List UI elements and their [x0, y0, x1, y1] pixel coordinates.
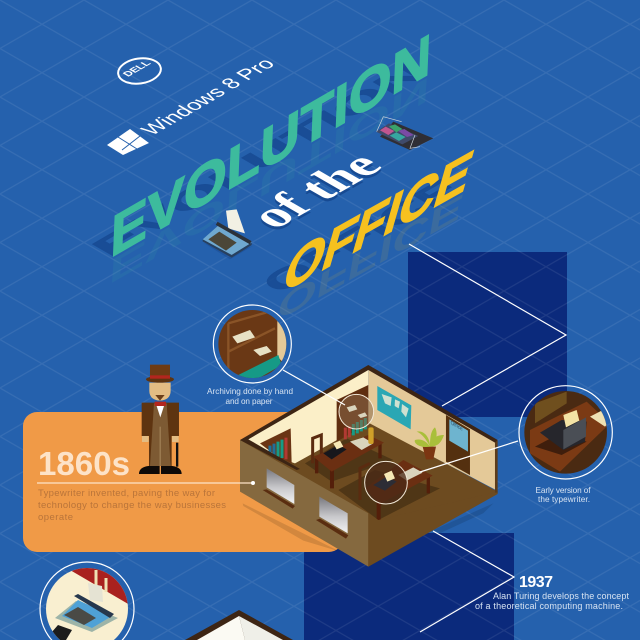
desk back [313, 435, 384, 488]
window right [316, 497, 348, 539]
window left [263, 468, 295, 509]
card description [38, 488, 226, 523]
chairs [313, 435, 370, 500]
connector: typewriter circle [420, 441, 518, 472]
back left wall [243, 368, 368, 463]
desk front [365, 460, 433, 520]
callout: archiving circle [213, 305, 293, 383]
icon: typewriter [203, 209, 253, 259]
plant [415, 427, 444, 459]
inner circle: typewriter highlight [365, 461, 407, 504]
title: of the: of the [236, 147, 394, 239]
title shadows and reflections: OFFICE [252, 174, 472, 298]
inner circle: shelf highlight [339, 394, 374, 429]
wall rim [240, 365, 498, 470]
floor [240, 422, 498, 567]
figure: Victorian man [139, 365, 182, 474]
caption: archiving: and on paper [226, 397, 273, 406]
connector: year line [37, 481, 255, 485]
room: next era office [185, 610, 293, 640]
door: Office [451, 420, 463, 433]
year heading: 1860s [38, 445, 130, 482]
door [446, 415, 470, 475]
title shadows and reflections: EVOLUTION [108, 68, 431, 292]
timeline entry: 1937: of a theoretical computing machine. [475, 601, 623, 611]
left bookshelf [260, 428, 292, 463]
Windows logo [107, 129, 149, 155]
caption: typewriter [536, 486, 591, 504]
caption: typewriter: the typewriter. [538, 495, 590, 504]
front right wall [368, 492, 498, 567]
caption: archiving [207, 387, 293, 406]
callout: bottom typewriter circle [39, 561, 135, 640]
Dell logo [116, 56, 163, 86]
connector lines [409, 244, 566, 632]
back right wall [368, 368, 496, 490]
title shadows and reflections: EVOLUTION [84, 58, 437, 262]
room: 1860s office [240, 365, 498, 567]
title: Office: OFFICE [276, 136, 480, 307]
panel: 1860s orange card [23, 412, 343, 552]
caption: archiving: Archiving done by hand [207, 387, 293, 396]
card description: operate [38, 512, 73, 523]
title: of the: of the [236, 144, 394, 236]
lamp [368, 427, 374, 444]
title shadows and reflections [84, 58, 472, 330]
front left wall [240, 440, 368, 567]
room shadow [243, 503, 493, 552]
callout: typewriter circle [519, 386, 613, 480]
title shadows and reflections: OFFICE [275, 185, 466, 330]
timeline entry: 1937 [475, 574, 629, 611]
card description: technology to change the way businesses [38, 500, 226, 511]
timeline entry: 1937: Alan Turing develops the concept [493, 591, 629, 601]
title: Evolution: EVOLUTION [109, 21, 432, 271]
wall map [377, 386, 411, 429]
timeline entry: 1937: 1937 [519, 574, 553, 591]
icon: tablet [376, 117, 433, 150]
caption: typewriter: Early version of [536, 486, 591, 495]
Windows 8 Pro wordmark: Windows 8 Pro [136, 55, 280, 139]
Dell logo: DELL [121, 59, 154, 79]
bookshelf back [337, 385, 368, 442]
navy panel: lower [304, 533, 514, 640]
rugs [305, 438, 440, 520]
navy panel: upper [408, 252, 567, 417]
card description: Typewriter invented, paving the way for [38, 488, 215, 499]
connector: archive circle [283, 370, 345, 405]
